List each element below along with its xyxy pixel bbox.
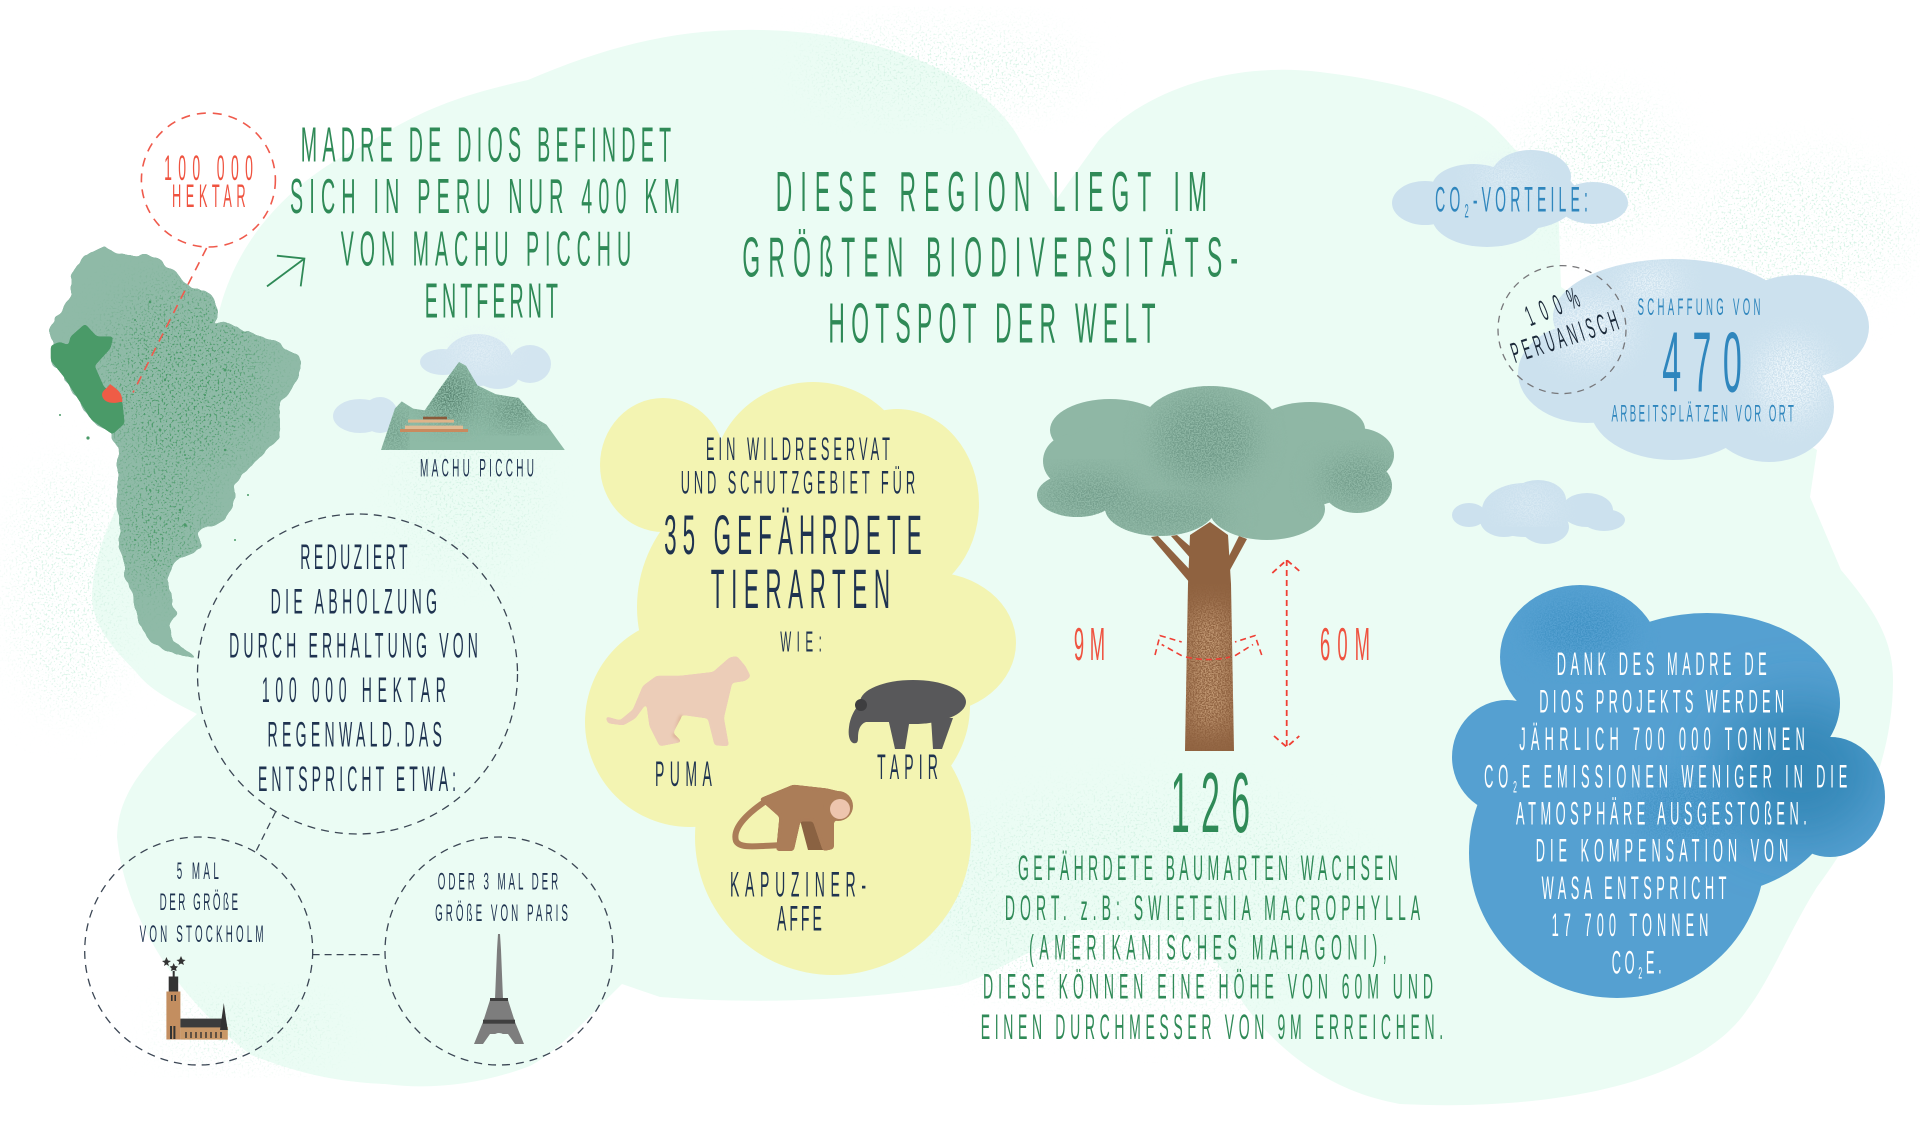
panel: CO2 heading cloud: 2	[1464, 202, 1469, 223]
location text	[290, 117, 680, 328]
label: 60M: 60M	[1320, 619, 1370, 671]
panel: Paris circle	[385, 837, 613, 1065]
panel: CO2 savings blue cloud: E EMISSIONEN WENIGER IN DIE	[1522, 760, 1847, 795]
icon: tree	[1037, 386, 1400, 751]
panel: CO2 savings blue cloud: E.	[1646, 946, 1662, 981]
text: tree description	[981, 848, 1443, 1047]
badge: 100% peruanisch: 100%	[1521, 281, 1584, 332]
label: puma: PUMA	[655, 754, 712, 794]
panel: CO2 savings blue cloud: 2	[1513, 777, 1517, 796]
panel: jobs cloud: SCHAFFUNG VON	[1638, 293, 1760, 320]
measure: diameter 9M	[1155, 636, 1262, 660]
location text: SICH IN PERU NUR 400 KM	[290, 168, 680, 223]
badge: 100% peruanisch: PERUANISCH	[1507, 304, 1622, 369]
callout: 100 000 hektar	[133, 113, 275, 392]
intro text: WIE:	[780, 625, 822, 658]
arrow to location text	[267, 256, 304, 286]
label: Machu Picchu: MACHU PICCHU	[420, 455, 534, 483]
panel: CO2 savings blue cloud: WASA ENTSPRICHT	[1542, 871, 1726, 907]
panel: Paris circle: ODER 3 MAL DER	[438, 867, 558, 895]
trunk speckle	[1189, 610, 1230, 730]
title	[742, 161, 1238, 355]
panel: deforestation circle: 100 000 HEKTAR	[262, 670, 446, 710]
panel: CO2 heading cloud	[1392, 150, 1628, 247]
title: DIESE REGION LIEGT IM	[776, 161, 1207, 224]
label: tapir: TAPIR	[877, 747, 938, 787]
icon: puma	[606, 657, 750, 746]
mountain body	[381, 362, 565, 450]
panel: deforestation circle: REDUZIERT	[300, 537, 407, 577]
intro text: EIN WILDRESERVAT	[706, 432, 890, 468]
text: tree description: (AMERIKANISCHES MAHAGONI),	[1029, 928, 1387, 967]
continent	[51, 248, 298, 657]
panel: deforestation circle: REGENWALD.DAS	[268, 715, 442, 754]
map: South America	[51, 248, 298, 657]
title: HOTSPOT DER WELT	[828, 292, 1156, 355]
location text: VON MACHU PICCHU	[341, 221, 631, 276]
panel: jobs cloud: 470	[1662, 314, 1742, 410]
panel: deforestation circle: ENTSPRICHT ETWA:	[258, 759, 456, 799]
panel: Paris circle: GRÖßE VON PARIS	[435, 899, 568, 926]
panel: CO2 savings blue cloud: CO	[1612, 946, 1635, 981]
icon: capuchin monkey	[735, 785, 853, 850]
mountain shading	[384, 369, 540, 454]
label: capuchin monkey: KAPUZINER-	[730, 865, 866, 905]
trunk and branches	[1151, 522, 1247, 751]
label: capuchin monkey: AFFE	[777, 899, 822, 939]
panel: CO2 savings blue cloud: JÄHRLICH 700 000 TONNEN	[1519, 722, 1805, 758]
text: tree description: DORT. z.B: SWIETENIA MACROPHYLLA	[1005, 888, 1420, 928]
panel: CO2 heading cloud: CO	[1435, 180, 1460, 220]
panel: Stockholm circle	[85, 837, 313, 1065]
canopy	[1037, 386, 1394, 540]
panel: jobs cloud: ARBEITSPLÄTZEN VOR ORT	[1611, 399, 1794, 427]
stat: 126 tree species: 126	[1171, 755, 1250, 850]
Peru	[51, 325, 124, 434]
panel: Stockholm circle: DER GRÖßE	[160, 888, 238, 915]
intro text: UND SCHUTZGEBIET FÜR	[681, 466, 915, 501]
panel: CO2 savings blue cloud: DIOS PROJEKTS WERDEN	[1539, 685, 1784, 721]
panel: CO2 savings blue cloud: ATMOSPHÄRE AUSGESTOßEN.	[1516, 797, 1807, 832]
location text: MADRE DE DIOS BEFINDET	[301, 117, 671, 172]
location text: ENTFERNT	[425, 273, 558, 328]
icon: tapir	[849, 680, 966, 749]
decorative small cloud	[1452, 480, 1625, 544]
connector: Stockholm to Paris	[313, 954, 385, 956]
panel: CO2 savings blue cloud: DIE KOMPENSATION VON	[1536, 834, 1788, 870]
panel: CO2 savings blue cloud: CO	[1484, 760, 1508, 795]
panel: CO2 heading cloud: -VORTEILE:	[1473, 180, 1588, 220]
label: capuchin monkey	[730, 865, 866, 939]
panel: deforestation circle	[198, 514, 518, 834]
panel: Stockholm circle: 5 MAL	[177, 857, 219, 884]
connector: circle to Stockholm	[256, 812, 276, 851]
panel: Stockholm circle: VON STOCKHOLM	[140, 920, 264, 947]
panel: CO2 savings blue cloud	[1452, 585, 1885, 998]
text: tree description: GEFÄHRDETE BAUMARTEN WACHSEN	[1018, 848, 1398, 888]
intro text	[664, 432, 922, 658]
callout: 100 000 hektar: 100 000	[164, 148, 253, 188]
text: tree description: EINEN DURCHMESSER VON 9M ERREICHEN.	[981, 1007, 1443, 1047]
map grain	[105, 290, 265, 590]
text: tree description: DIESE KÖNNEN EINE HÖHE VON 60M UND	[983, 967, 1433, 1006]
terraces	[400, 417, 468, 432]
icon: Machu Picchu mountain	[333, 334, 565, 454]
blue cloud shading	[1530, 600, 1880, 840]
intro text: TIERARTEN	[711, 558, 890, 621]
title: GRÖßTEN BIODIVERSITÄTS-	[742, 227, 1238, 290]
canopy shading	[1040, 395, 1400, 529]
callout: 100 000 hektar: HEKTAR	[172, 179, 246, 215]
label: 9M: 9M	[1074, 619, 1105, 671]
panel: CO2 savings blue cloud: 17 700 TONNEN	[1552, 908, 1708, 944]
Madre de Dios region	[102, 384, 122, 403]
map speckles	[59, 301, 251, 561]
icon: Eiffel tower	[474, 934, 524, 1044]
panel: deforestation circle: DIE ABHOLZUNG	[271, 582, 437, 621]
badge: 100% peruanisch	[1498, 266, 1626, 394]
icon: Stockholm city hall	[162, 956, 228, 1040]
intro text: 35 GEFÄHRDETE	[664, 504, 922, 567]
panel: deforestation circle: DURCH ERHALTUNG VON	[229, 626, 478, 666]
cloud highlights	[1550, 267, 1824, 420]
back clouds	[333, 334, 551, 433]
panel: wildlife yellow cloud	[585, 382, 1016, 975]
panel: CO2 savings blue cloud: DANK DES MADRE DE	[1557, 647, 1767, 683]
panel: jobs cloud	[1518, 259, 1869, 462]
panel: CO2 savings blue cloud: 2	[1638, 963, 1642, 982]
measure: height 60M	[1272, 560, 1302, 747]
